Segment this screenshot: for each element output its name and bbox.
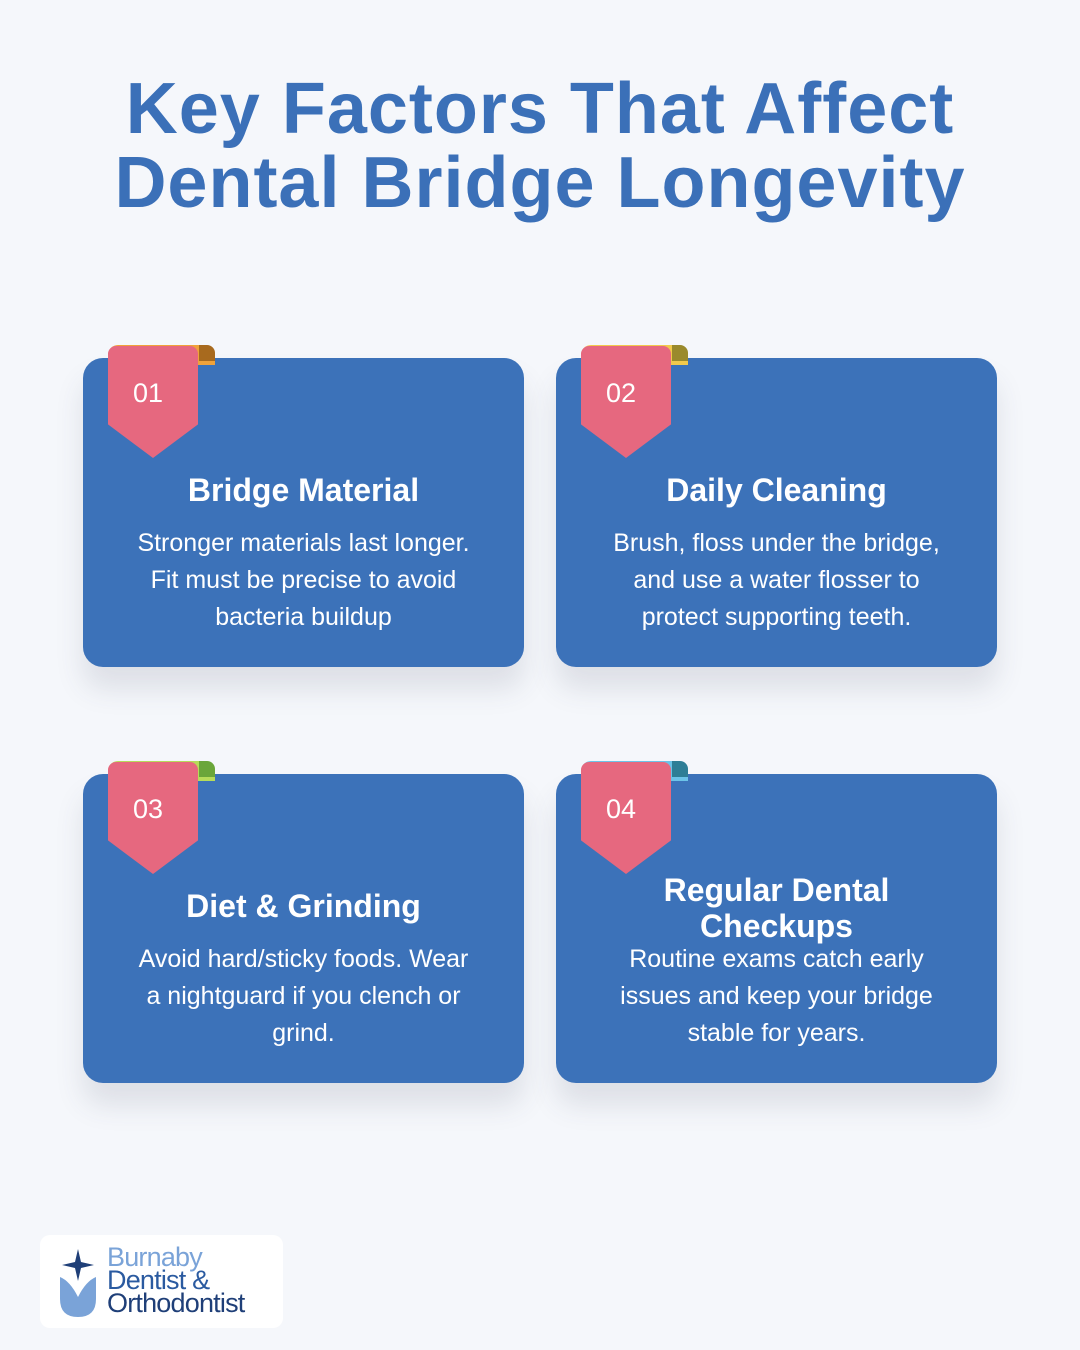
text: and use a water flosser to bbox=[633, 566, 920, 594]
text: a nightguard if you clench or bbox=[146, 982, 461, 1010]
panel: daily cleaning: 02 bbox=[606, 378, 636, 408]
text: Brush, floss under the bridge, bbox=[613, 529, 940, 557]
badge: 02 bbox=[581, 346, 671, 458]
text: Fit must be precise to avoid bbox=[151, 566, 456, 594]
heading: Diet & Grinding bbox=[186, 888, 421, 924]
text bbox=[137, 529, 470, 631]
heading: Bridge Material bbox=[188, 472, 419, 508]
logo text: Burnaby bbox=[107, 1242, 202, 1272]
heading: Regular Dental bbox=[664, 872, 889, 908]
logo bbox=[40, 1235, 283, 1328]
title: Dental Bridge Longevity bbox=[114, 143, 966, 223]
icon: logo mark bbox=[60, 1249, 96, 1317]
panel: diet & grinding bbox=[83, 774, 524, 1083]
logo text: Orthodontist bbox=[107, 1288, 244, 1318]
logo text bbox=[107, 1242, 246, 1318]
panel: regular checkups bbox=[556, 774, 997, 1083]
badge: 04 bbox=[581, 762, 671, 874]
text: Routine exams catch early bbox=[629, 945, 924, 973]
badge: 01 bbox=[108, 346, 198, 458]
badge: 03 bbox=[108, 762, 198, 874]
heading bbox=[664, 872, 889, 944]
heading: Checkups bbox=[700, 908, 853, 944]
panel: diet & grinding: 03 bbox=[133, 794, 163, 824]
text bbox=[620, 945, 933, 1047]
title: Key Factors That Affect bbox=[126, 69, 954, 149]
heading: Daily Cleaning bbox=[666, 472, 887, 508]
text: bacteria buildup bbox=[215, 603, 392, 631]
text: stable for years. bbox=[688, 1019, 865, 1047]
text: protect supporting teeth. bbox=[642, 603, 911, 631]
title bbox=[114, 69, 966, 223]
text: Avoid hard/sticky foods. Wear bbox=[139, 945, 468, 973]
text: Stronger materials last longer. bbox=[137, 529, 470, 557]
tab bbox=[108, 345, 215, 365]
panel: daily cleaning bbox=[556, 358, 997, 667]
panel: regular checkups: 04 bbox=[606, 794, 636, 824]
text: grind. bbox=[272, 1019, 335, 1047]
logo text: Dentist & bbox=[107, 1265, 209, 1295]
panel: bridge material bbox=[83, 358, 524, 667]
text: issues and keep your bridge bbox=[620, 982, 933, 1010]
text bbox=[138, 945, 468, 1047]
text bbox=[613, 529, 940, 631]
panel: bridge material: 01 bbox=[133, 378, 163, 408]
